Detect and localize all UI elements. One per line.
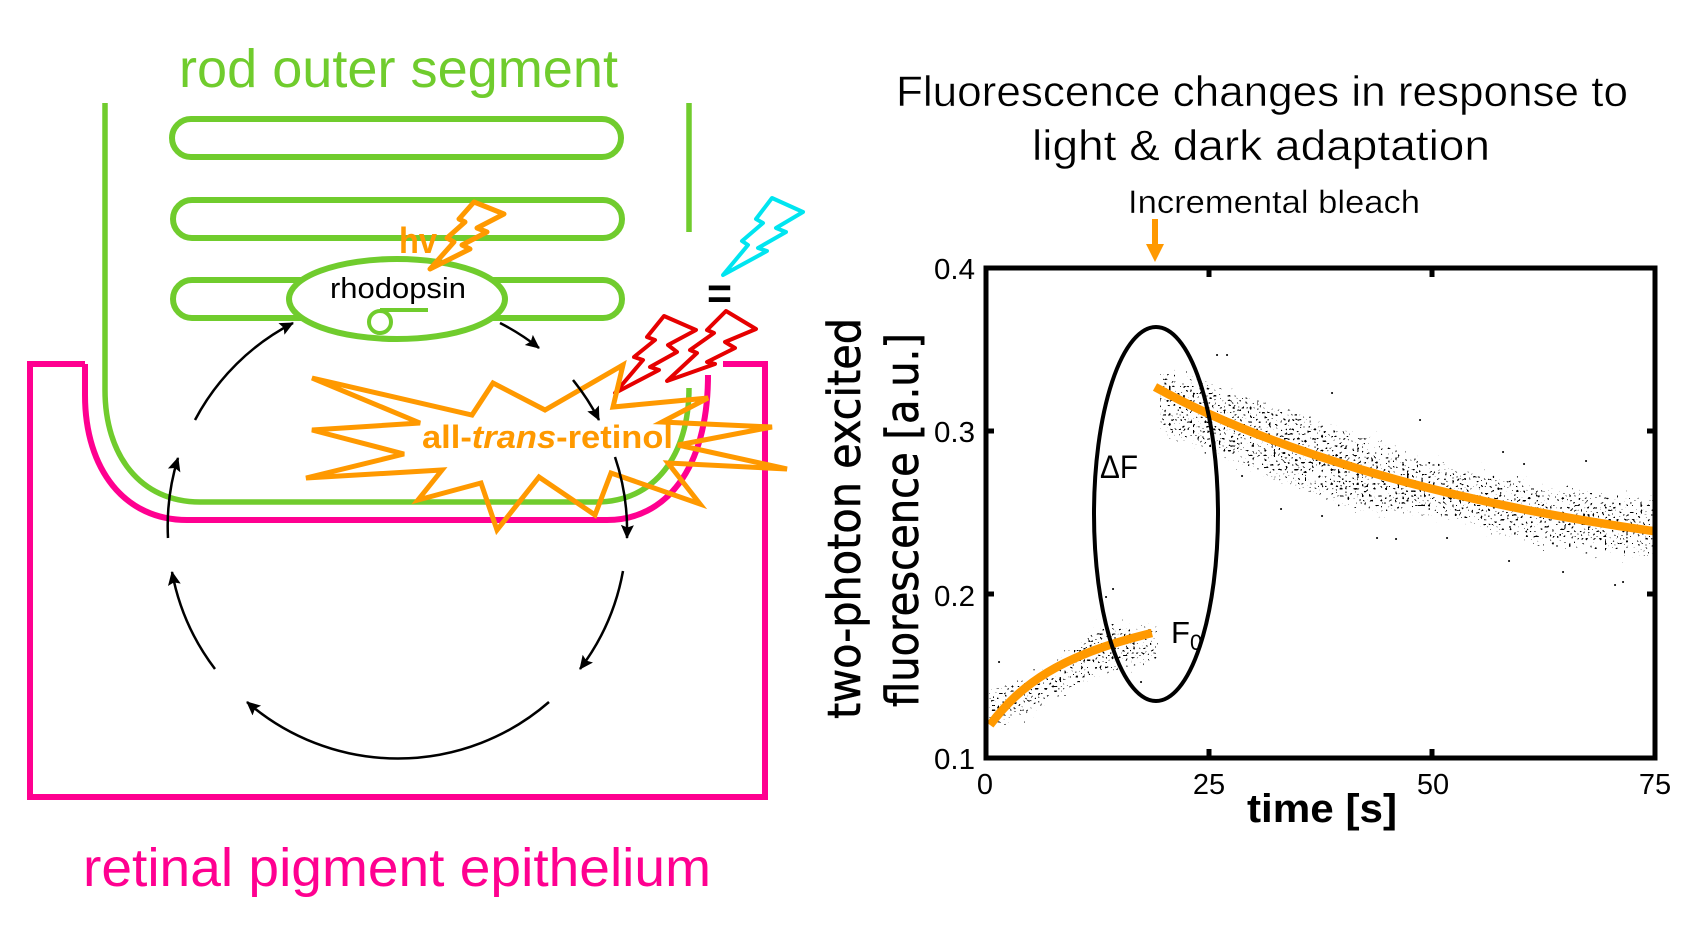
y axis label: fluorescence [a.u.] <box>876 333 929 707</box>
heading: rod outer segment: rod outer segment <box>179 39 618 99</box>
chart title <box>896 68 1628 170</box>
x tick labels: 25 <box>1193 769 1225 801</box>
all-trans-retinol label: all-trans-retinol <box>422 419 673 455</box>
annotation: delta F ellipse <box>1094 327 1218 701</box>
panel: rod outer segment membrane <box>105 103 689 502</box>
x axis label: time [s] <box>1247 787 1397 831</box>
rhodopsin ellipse <box>289 259 505 339</box>
chart: outlier dots <box>999 355 1623 682</box>
chart: fit curve before bleach <box>990 633 1152 725</box>
arrow: bleach <box>1146 219 1164 262</box>
annotation: delta F label: ΔF <box>1100 449 1138 485</box>
x tick labels: 75 <box>1639 769 1671 801</box>
rhodopsin label: rhodopsin <box>330 273 466 305</box>
x tick labels: 50 <box>1417 769 1449 801</box>
y tick labels: 0.2 <box>934 581 975 613</box>
visual cycle arrows <box>168 323 627 759</box>
icon: cyan lightning bolt <box>723 198 803 275</box>
y axis label: two-photon excited <box>818 318 871 719</box>
annotation: F0 label: F <box>1171 615 1190 650</box>
icon: retinal chromophore <box>369 310 428 333</box>
y tick labels: 0.3 <box>934 417 975 449</box>
icon: orange lightning bolt <box>430 202 504 269</box>
disk 2 <box>173 200 622 238</box>
icon: red lightning bolt right <box>667 311 756 381</box>
chart: scatter dots before bleach <box>989 620 1158 725</box>
chart: fit curve after bleach <box>1155 387 1653 531</box>
icon: red lightning bolt left <box>615 316 696 393</box>
panel: retinal pigment epithelium outline <box>30 364 765 797</box>
chart title: Fluorescence changes in response to <box>896 68 1628 116</box>
disk 3 <box>173 280 622 318</box>
y tick labels <box>934 254 975 776</box>
x tick labels: 0 <box>977 769 993 801</box>
annotation: incremental bleach: Incremental bleach <box>1128 184 1420 220</box>
annotation: F0 label: 0 <box>1190 630 1202 655</box>
y axis label <box>818 318 929 719</box>
disk 1 <box>172 119 621 157</box>
heading: retinal pigment epithelium: retinal pigment epithelium <box>83 838 711 898</box>
starburst: all-trans-retinol <box>306 365 787 530</box>
equals sign: = <box>707 269 732 318</box>
hv label: hv <box>399 220 437 261</box>
chart frame and ticks <box>986 268 1655 758</box>
x tick labels <box>977 769 1671 801</box>
chart title: light & dark adaptation <box>1032 122 1490 170</box>
y tick labels: 0.1 <box>934 744 975 776</box>
y tick labels: 0.4 <box>934 254 975 286</box>
chart: scatter dots after bleach <box>1150 360 1665 560</box>
